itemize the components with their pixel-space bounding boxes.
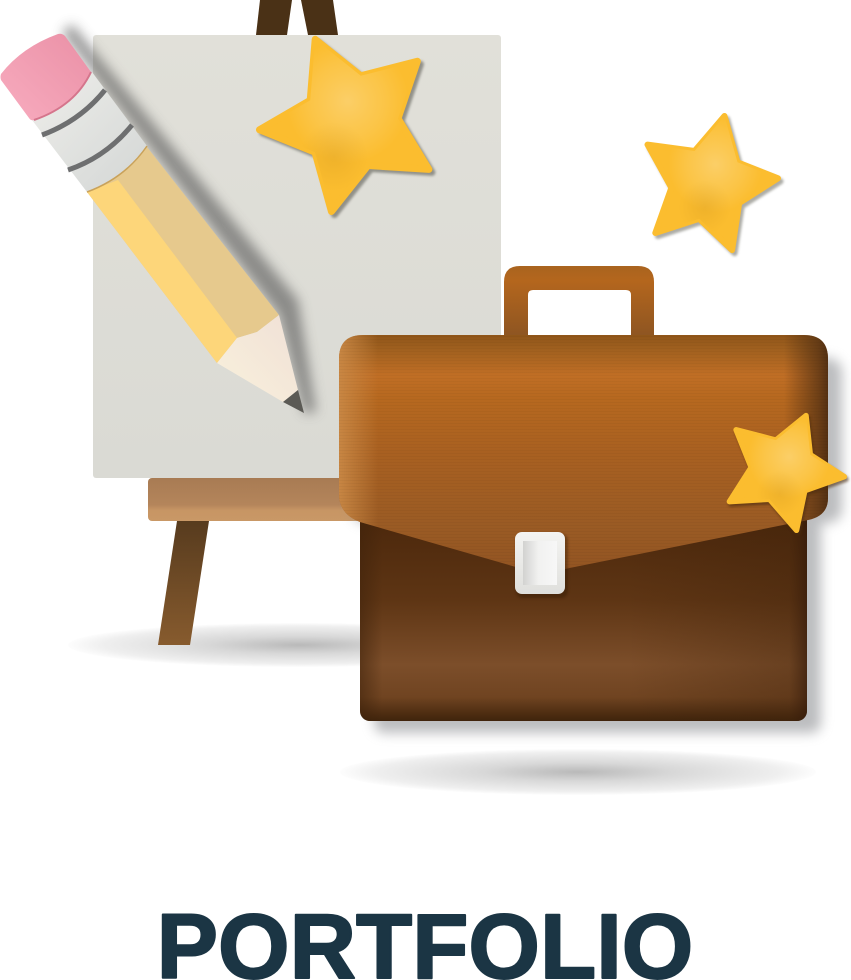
pencil body bbox=[87, 147, 279, 363]
ground shadow: easel bbox=[68, 623, 532, 667]
briefcase handle bbox=[504, 266, 654, 340]
pencil eraser bbox=[0, 34, 91, 120]
pencil shadow bbox=[62, 24, 316, 413]
briefcase flap bbox=[339, 335, 828, 574]
briefcase star bbox=[729, 416, 846, 533]
pencil lead bbox=[283, 390, 304, 413]
canvas board bbox=[93, 35, 501, 478]
briefcase shadow bbox=[352, 358, 842, 733]
easel front leg bbox=[158, 521, 209, 645]
pencil bbox=[0, 34, 304, 413]
pencil ferrule bbox=[32, 72, 147, 192]
briefcase body bbox=[360, 500, 807, 721]
large star on canvas bbox=[260, 39, 432, 214]
pencil wood tip bbox=[217, 315, 298, 402]
briefcase clasp bbox=[515, 532, 568, 598]
floating star bbox=[648, 116, 780, 253]
ground shadow: briefcase bbox=[340, 749, 816, 795]
easel shelf bbox=[148, 478, 363, 521]
easel back legs bbox=[256, 0, 338, 35]
